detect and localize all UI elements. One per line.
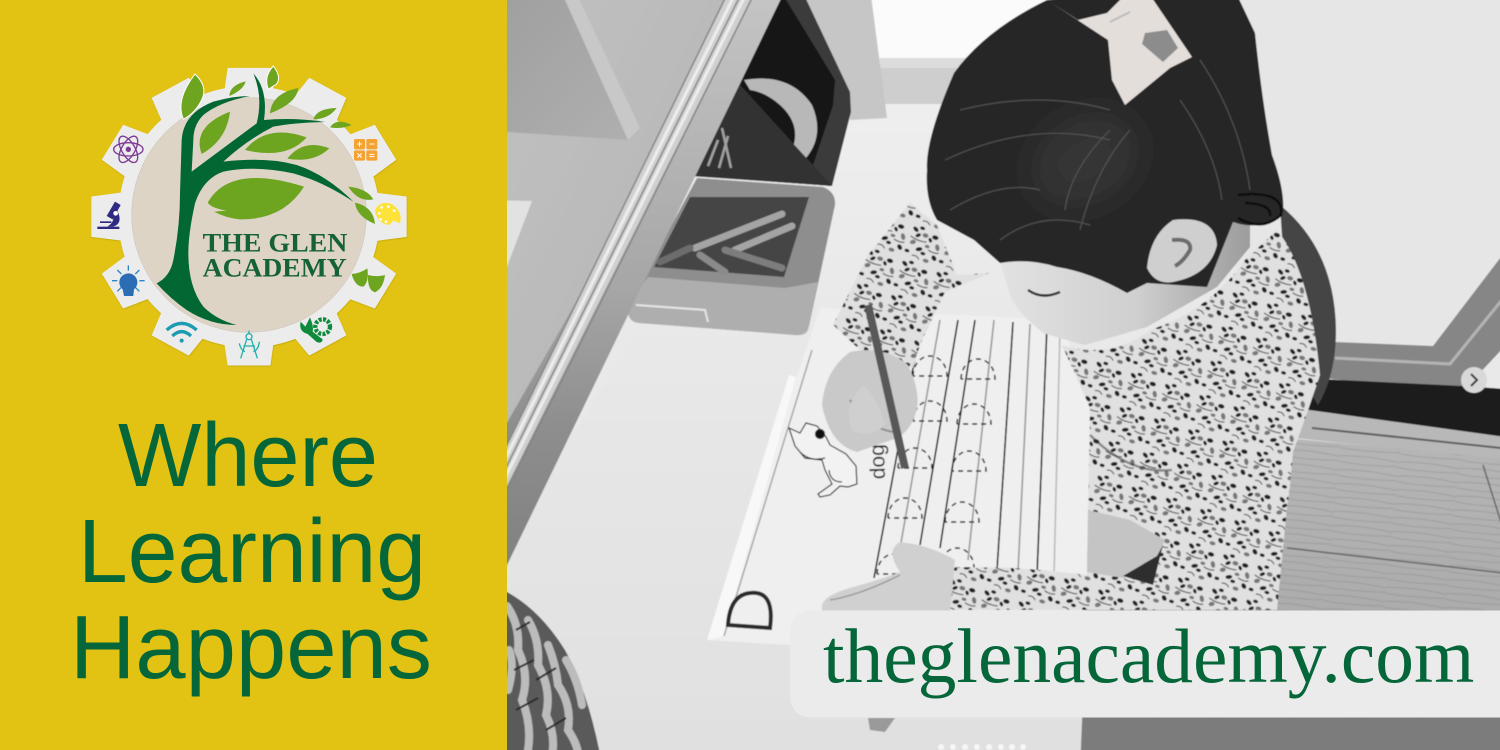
outdoor surface [1277,218,1278,219]
logo: The Glen Academy gear and tree [91,66,407,365]
hand shadow [850,400,895,432]
crayons [660,214,792,272]
dog drawing [789,423,857,497]
box latch [636,305,708,322]
heading: Where Learning Happens: Happens [70,598,432,698]
inner ear [1172,240,1190,266]
carousel arrow [1461,367,1487,393]
beam moulding highlights [507,0,745,478]
panel edge [564,0,640,140]
frame highlight [1335,290,1500,364]
floor plank lines [1287,465,1500,575]
leaves [181,66,375,224]
icon: wifi [167,323,197,343]
fingers over crayon [849,385,885,434]
hand holding crayon [822,350,918,452]
sill line [1312,428,1500,450]
dashed tracing letters [877,356,995,574]
neck and face [1000,205,1250,345]
icon: microscope [97,202,121,229]
finger under pill [868,718,895,732]
crayon box lid front [628,277,818,335]
icon: masks [352,268,385,292]
wicker basket [490,585,603,750]
trim under window [880,58,966,68]
photo: child tracing letters at a table [480,0,1500,750]
table top [587,104,1087,750]
heading: Where Learning Happens: Where [118,406,378,506]
upper left shelf panel [507,0,627,140]
hair strands [945,60,1250,240]
icon: calculator [354,139,377,161]
icon: atom [114,133,143,165]
flyaway curl [1238,194,1281,224]
floor lower strip [1080,717,1500,750]
cubby divider [695,84,832,186]
door sill [1295,408,1500,462]
icon: palette [375,203,401,225]
chair back [1280,205,1336,405]
bow [1047,0,1192,105]
dark door track [1300,378,1500,440]
carousel dots [938,744,1026,750]
pants [1087,510,1165,578]
gear ring with teeth [91,68,407,365]
ridges in divider [708,128,731,168]
panel: yellow brand panel [0,0,507,750]
logo wordmark [203,228,347,283]
window frame [1328,258,1500,387]
lower hand [822,542,955,612]
worksheet word: dog [866,444,890,480]
worksheet fold [724,350,812,636]
floor grain [1198,443,1500,610]
cubby [690,0,851,186]
left sleeve [833,203,990,368]
letter D [728,593,771,628]
hair [927,0,1283,293]
heading: Where Learning Happens [70,406,432,698]
worksheet ruled lines [874,320,1060,578]
worksheet [711,396,1086,645]
crayon box [628,178,835,335]
window bright area [872,0,1048,58]
logo wordmark: THE GLEN [203,228,347,258]
crayon [868,305,905,468]
heading: Where Learning Happens: Learning [78,502,426,602]
tape roll [744,78,817,158]
pants shadow [1123,545,1163,585]
tree trunk and branches [157,73,353,325]
icon: compass [239,331,259,358]
floor [1086,438,1500,718]
shelf beam [507,0,781,566]
ear [1147,219,1217,282]
cabinet side [797,0,887,120]
wooden shelf [507,0,781,424]
eyelashes [1028,290,1060,296]
beige disc [132,98,366,332]
beam moulding [507,0,750,487]
crayon box inner [654,197,809,277]
cubby interior [740,0,835,165]
worksheet edge band [707,375,796,640]
shirt fold [1090,435,1172,471]
trim lower [880,68,957,104]
hair sheen [1011,91,1159,229]
website address: theglenacademy.com [823,613,1474,699]
logo wordmark: ACADEMY [203,253,347,283]
website pill [790,610,1500,718]
small white card [507,200,532,267]
beam moulding groove [507,0,752,468]
shirt body [950,230,1320,610]
lower hand crease [830,575,900,600]
icon: wrench and gear [300,317,330,343]
window background [564,57,1500,510]
icon: bulb [112,265,145,296]
